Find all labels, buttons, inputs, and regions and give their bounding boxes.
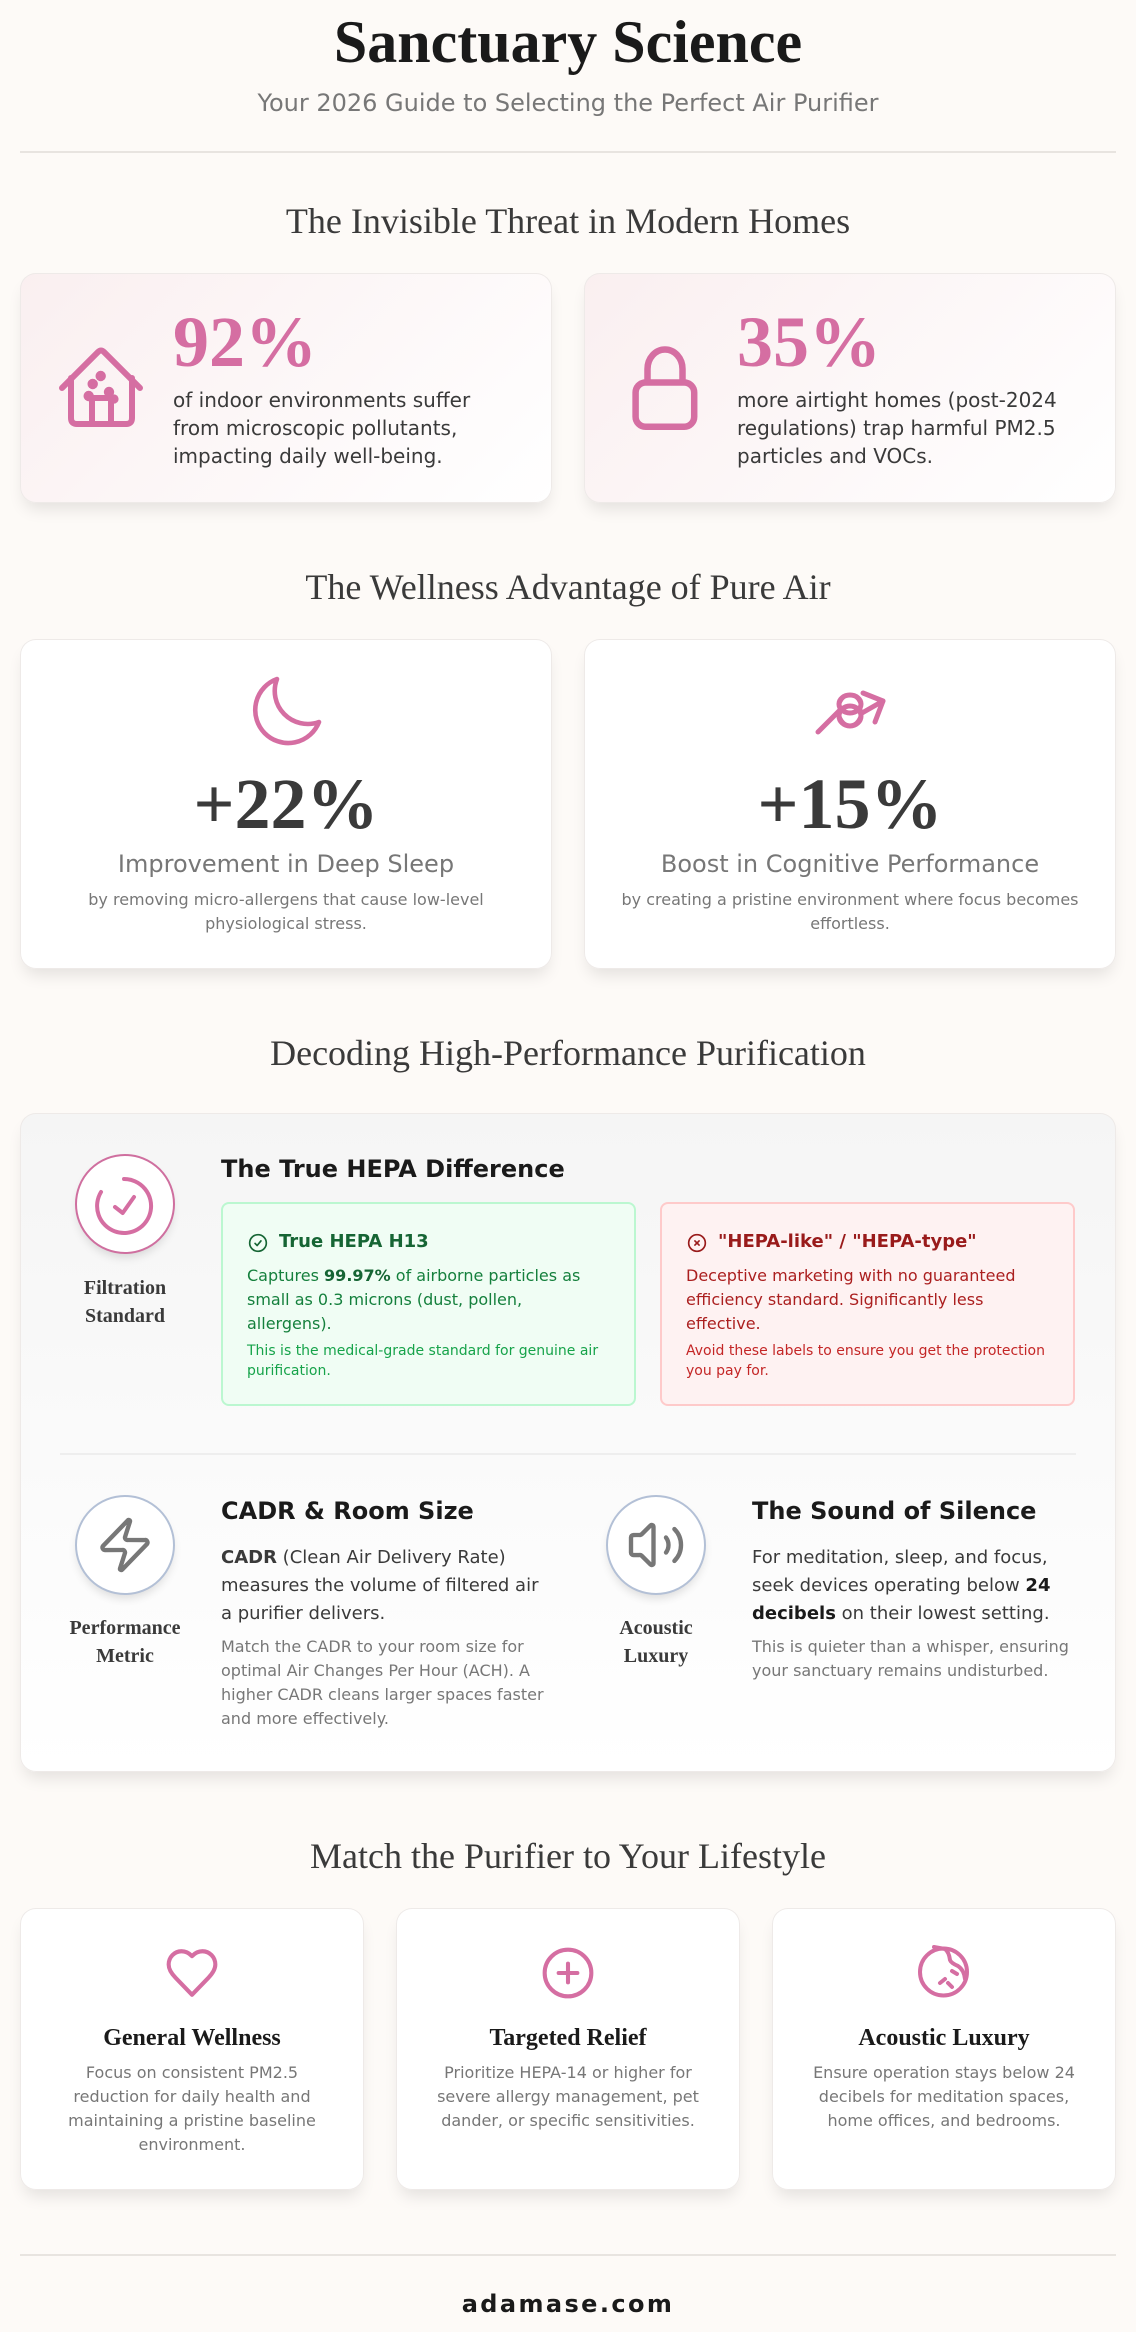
- silence body: For meditation, sleep, and focus,: [752, 1547, 1048, 1568]
- icon: house with particles: [59, 348, 143, 427]
- silence note: your sanctuary remains undisturbed.: [752, 1661, 1048, 1680]
- card description: severe allergy management, pet: [437, 2087, 699, 2106]
- box note: Avoid these labels to ensure you get the protection: [686, 1343, 1045, 1359]
- heading: decoding purification: Decoding High-Performance Purification: [270, 1033, 866, 1073]
- stat label: Improvement in Deep Sleep: [118, 850, 454, 878]
- box body: allergens).: [247, 1314, 332, 1333]
- card description: [813, 2063, 1075, 2130]
- heading: wellness advantage: The Wellness Advantage of Pure Air: [305, 567, 831, 607]
- icon: lock: [632, 346, 698, 430]
- stat description: by creating a pristine environment where focus becomes: [621, 890, 1079, 909]
- CADR body: a purifier delivers.: [221, 1603, 385, 1624]
- panel: cognitive performance: [584, 639, 1116, 969]
- box body: small as 0.3 microns (dust, pollen,: [247, 1290, 522, 1309]
- icon: acoustic badge: [606, 1495, 706, 1595]
- stat number: 92%: [173, 302, 317, 382]
- box note: This is the medical-grade standard for genuine air: [247, 1343, 598, 1359]
- box title: "HEPA-like" / "HEPA-type": [718, 1231, 977, 1252]
- card description: [437, 2063, 699, 2130]
- label: performance metric: Metric: [96, 1645, 154, 1667]
- stat description: of indoor environments suffer: [173, 388, 470, 412]
- box note: you pay for.: [686, 1363, 769, 1379]
- CADR note: Match the CADR to your room size for: [221, 1637, 524, 1656]
- card description: reduction for daily health and: [73, 2087, 311, 2106]
- CADR note: and more effectively.: [221, 1709, 389, 1728]
- icon: heart: [166, 1949, 218, 1997]
- heading: true HEPA: The True HEPA Difference: [221, 1155, 565, 1183]
- silence note: [752, 1637, 1069, 1680]
- box title: True HEPA H13: [279, 1231, 429, 1252]
- stat label: Boost in Cognitive Performance: [661, 850, 1039, 878]
- footer: adamase.com: [462, 2290, 674, 2318]
- panel: true HEPA H13: [221, 1202, 636, 1406]
- card description: maintaining a pristine baseline: [68, 2111, 316, 2130]
- icon: check circle: [248, 1234, 268, 1252]
- label: performance metric: [69, 1617, 181, 1667]
- stat description: effortless.: [810, 914, 890, 933]
- box body: efficiency standard. Significantly less: [686, 1290, 983, 1309]
- icon: x circle: [688, 1234, 706, 1252]
- title: Sanctuary Science: [334, 9, 802, 75]
- icon: acoustic dial: [918, 1945, 969, 1998]
- card title: Acoustic Luxury: [858, 2025, 1030, 2051]
- stat number: 35%: [737, 302, 881, 382]
- panel: deep sleep: [20, 639, 552, 969]
- icon: performance badge: [75, 1495, 175, 1595]
- subtitle: Your 2026 Guide to Selecting the Perfect Air Purifier: [257, 89, 879, 117]
- box note: [686, 1343, 1045, 1379]
- label: acoustic luxury: Acoustic: [619, 1617, 693, 1639]
- icon: plus circle: [542, 1948, 594, 1998]
- card title: General Wellness: [103, 2025, 281, 2051]
- icon: moon: [252, 676, 322, 746]
- label: performance metric: Performance: [69, 1617, 181, 1639]
- panel: HEPA-like: [660, 1202, 1075, 1406]
- card title: Targeted Relief: [489, 2025, 647, 2051]
- heading: match purifier: Match the Purifier to Your Lifestyle: [310, 1836, 826, 1876]
- card description: Ensure operation stays below 24: [813, 2063, 1075, 2082]
- CADR note: optimal Air Changes Per Hour (ACH). A: [221, 1661, 530, 1680]
- panel: general wellness: [20, 1908, 364, 2190]
- icon: eye with arrow: [816, 690, 886, 734]
- label: filtration standard: Standard: [85, 1305, 165, 1327]
- heading: sound of silence: The Sound of Silence: [752, 1497, 1036, 1525]
- CADR body: CADR (Clean Air Delivery Rate): [221, 1547, 506, 1568]
- heading: invisible threat: The Invisible Threat in Modern Homes: [286, 201, 850, 241]
- box body: effective.: [686, 1314, 761, 1333]
- stat description: impacting daily well-being.: [173, 444, 443, 468]
- CADR body: [221, 1547, 538, 1624]
- box body: [247, 1266, 580, 1333]
- heading: CADR: CADR & Room Size: [221, 1497, 474, 1525]
- panel: targeted relief: [396, 1908, 740, 2190]
- box note: [246, 1343, 598, 1379]
- stat description: [173, 388, 470, 468]
- label: acoustic luxury: Luxury: [624, 1645, 688, 1667]
- panel: 35% stat: [584, 273, 1116, 503]
- label: filtration standard: Filtration: [84, 1277, 166, 1299]
- label: acoustic luxury: [619, 1617, 693, 1667]
- CADR body: measures the volume of filtered air: [221, 1575, 538, 1596]
- panel: acoustic luxury: [772, 1908, 1116, 2190]
- icon: filtration badge: [75, 1154, 175, 1254]
- stat description: [737, 388, 1057, 468]
- CADR note: [221, 1637, 544, 1728]
- silence body: [752, 1547, 1050, 1624]
- stat description: [621, 890, 1079, 933]
- card description: Prioritize HEPA-14 or higher for: [444, 2063, 692, 2082]
- stat number: +15%: [757, 764, 943, 844]
- stat description: [88, 890, 484, 933]
- stat number: +22%: [193, 764, 379, 844]
- stat description: from microscopic pollutants,: [173, 416, 457, 440]
- card description: home offices, and bedrooms.: [827, 2111, 1060, 2130]
- CADR note: higher CADR cleans larger spaces faster: [221, 1685, 544, 1704]
- box note: purification.: [247, 1363, 331, 1379]
- box body: Deceptive marketing with no guaranteed: [686, 1266, 1015, 1285]
- card description: decibels for meditation spaces,: [819, 2087, 1069, 2106]
- stat description: by removing micro-allergens that cause low-level: [88, 890, 484, 909]
- stat description: more airtight homes (post-2024: [737, 388, 1057, 412]
- silence body: decibels on their lowest setting.: [752, 1603, 1050, 1624]
- card description: Focus on consistent PM2.5: [86, 2063, 298, 2082]
- card description: [68, 2063, 316, 2154]
- stat description: regulations) trap harmful PM2.5: [737, 416, 1056, 440]
- box body: [686, 1266, 1015, 1333]
- panel: decoding purification: [20, 1113, 1116, 1772]
- stat description: physiological stress.: [205, 914, 367, 933]
- silence note: This is quieter than a whisper, ensuring: [752, 1637, 1069, 1656]
- panel: 92% stat: [20, 273, 552, 503]
- stat description: particles and VOCs.: [737, 444, 933, 468]
- silence body: seek devices operating below 24: [752, 1575, 1050, 1596]
- card description: environment.: [138, 2135, 245, 2154]
- label: filtration standard: [84, 1277, 166, 1327]
- card description: dander, or specific sensitivities.: [441, 2111, 695, 2130]
- box body: Captures 99.97% of airborne particles as: [247, 1266, 580, 1285]
